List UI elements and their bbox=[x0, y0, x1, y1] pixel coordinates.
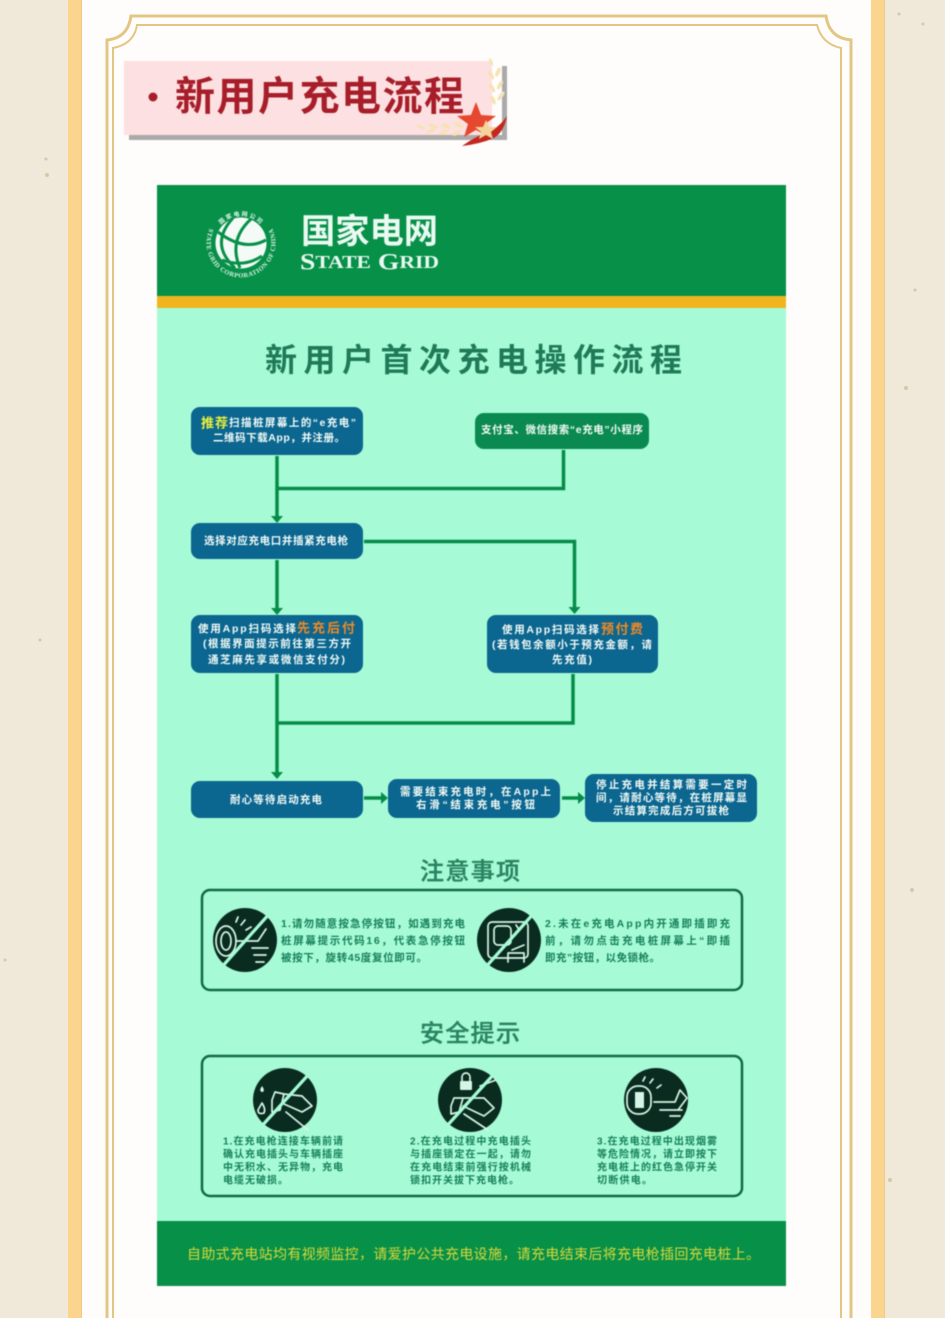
heading: notes: 注意事项 bbox=[420, 858, 520, 886]
text: note 2: 即充”按钮，以免锁枪。 bbox=[545, 951, 660, 964]
text: safety 2 bbox=[410, 1134, 531, 1186]
flow step: settle bbox=[585, 774, 757, 822]
text: safety 2: 锁扣开关拔下充电枪。 bbox=[410, 1174, 519, 1186]
text: safety 3: 切断供电。 bbox=[597, 1174, 652, 1186]
flow step: wait bbox=[191, 781, 363, 818]
flow step: download app: 推荐 bbox=[201, 416, 228, 430]
flow step: plug in bbox=[191, 523, 363, 559]
poster bbox=[156, 184, 787, 1287]
flow step: pay after charging: 先充后付 bbox=[297, 620, 355, 636]
text: safety 3 bbox=[597, 1134, 717, 1186]
footer notice bbox=[157, 1221, 786, 1286]
flow step: download app: 二维码下载App，并注册。 bbox=[213, 431, 345, 444]
text: safety 1: 电缆无破损。 bbox=[223, 1174, 288, 1186]
flow step: plug in: 选择对应充电口并插紧充电枪 bbox=[204, 534, 348, 547]
flow step: settle: 间，请耐心等待，在桩屏幕显 bbox=[596, 791, 748, 804]
flow step: settle: 示结算完成后方可拔枪 bbox=[613, 804, 730, 817]
text: note 1: 被按下，旋转45度复位即可。 bbox=[281, 951, 427, 964]
logo: State Grid globe: STATE GRID CORPORATION OF CHINA bbox=[206, 228, 276, 278]
text: safety 2: 与插座锁定在一起，请勿 bbox=[410, 1148, 531, 1160]
flow step: settle: 停止充电并结算需要一定时 bbox=[596, 778, 748, 791]
text: note 1 bbox=[281, 917, 466, 964]
logo wordmark bbox=[300, 213, 439, 274]
text: safety 2: 在充电结束前强行按机械 bbox=[410, 1160, 531, 1174]
icon: check water and foreign objects bbox=[253, 1068, 317, 1132]
decorative frame bbox=[107, 16, 851, 1318]
heading: safety: 安全提示 bbox=[420, 1020, 520, 1048]
poster header bbox=[156, 184, 787, 309]
text: safety 3: 等危险情况，请立即按下 bbox=[597, 1148, 717, 1160]
flow step: prepay: 使用App扫码选择 bbox=[502, 623, 600, 636]
panel: safety bbox=[202, 1056, 742, 1196]
text: note 2: 2.未在e充电App内开通即插即充 bbox=[545, 917, 730, 930]
flow step: prepay: (若钱包余额小于预充金额，请 bbox=[492, 638, 652, 651]
flow connectors and arrows bbox=[271, 450, 585, 804]
text: safety 1 bbox=[223, 1134, 343, 1186]
text: note 2 bbox=[545, 917, 730, 964]
flow step: download app: 扫描桩屏幕上的“e充电” bbox=[229, 416, 356, 429]
text: safety 3: 3.在充电过程中出现烟雾 bbox=[597, 1134, 717, 1148]
text: safety 1: 1.在充电枪连接车辆前请 bbox=[223, 1134, 343, 1148]
text: note 1: 1.请勿随意按急停按钮，如遇到充电 bbox=[281, 917, 466, 930]
text: safety 1: 确认充电插头与车辆插座 bbox=[223, 1148, 343, 1160]
flow step: mini program bbox=[475, 413, 649, 449]
flow step: end charging: 右滑“结束充电”按钮 bbox=[416, 798, 536, 811]
poster title: 新用户首次充电操作流程 bbox=[265, 342, 682, 378]
logo wordmark: STATE G RID bbox=[300, 250, 439, 274]
flow step: pay after charging bbox=[191, 615, 363, 673]
flow step: mini program: 支付宝、微信搜索“e充电”小程序 bbox=[481, 423, 644, 436]
icon: do not force unplug bbox=[438, 1068, 502, 1132]
text: safety 3: 充电桩上的红色急停开关 bbox=[597, 1160, 717, 1174]
flow step: download app bbox=[191, 407, 363, 455]
flow step: pay after charging: (根据界面提示前往第三方开 bbox=[203, 637, 352, 650]
icon: do not press emergency stop bbox=[213, 908, 277, 972]
flow step: pay after charging: 使用App扫码选择 bbox=[198, 622, 296, 635]
flow step: wait: 耐心等待启动充电 bbox=[230, 793, 322, 806]
panel: notes bbox=[202, 890, 742, 990]
footer notice: 自助式充电站均有视频监控，请爱护公共充电设施，请充电结束后将充电枪插回充电桩上。 bbox=[187, 1246, 760, 1262]
text: note 2: 前，请勿点击充电桩屏幕上“即插 bbox=[545, 934, 730, 947]
logo wordmark: 国家电网 bbox=[301, 213, 438, 251]
text: safety 1: 中无积水、无异物，充电 bbox=[223, 1160, 343, 1174]
text: safety 2: 2.在充电过程中充电插头 bbox=[410, 1134, 531, 1148]
icon: press emergency stop bbox=[624, 1068, 688, 1132]
flow step: end charging bbox=[388, 779, 560, 818]
icon: wheat and star ornament bbox=[416, 58, 507, 146]
flow step: end charging: 需要结束充电时，在App上 bbox=[400, 785, 552, 798]
flow step: prepay bbox=[487, 615, 658, 673]
text: note 1: 桩屏幕提示代码16，代表急停按钮 bbox=[281, 934, 466, 947]
icon: do not tap plug and charge bbox=[477, 908, 541, 972]
section title banner: 新用户充电流程 bbox=[175, 75, 464, 119]
logo: State Grid globe: 国家电网公司 bbox=[218, 210, 264, 226]
flow step: prepay: 预付费 bbox=[601, 622, 643, 636]
section title banner bbox=[124, 58, 507, 146]
flow step: pay after charging: 通芝麻先享或微信支付分) bbox=[208, 653, 345, 666]
flow step: prepay: 先充值) bbox=[552, 653, 592, 666]
